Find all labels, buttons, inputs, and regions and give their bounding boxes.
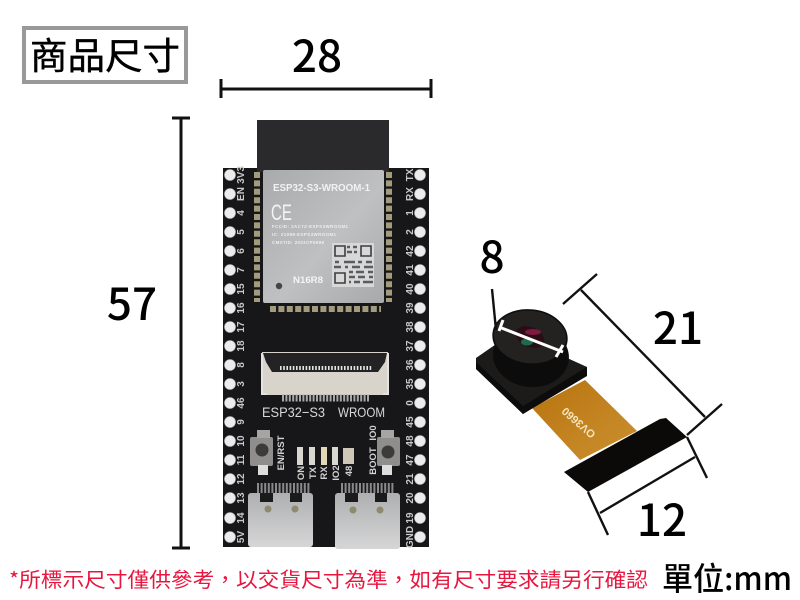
left pin labels: 13 — [236, 492, 247, 504]
left pin headers — [224, 170, 236, 542]
status LEDs: 48 — [344, 466, 355, 476]
left pin labels: 3V3 — [236, 166, 247, 184]
status LEDs: TX — [308, 466, 319, 479]
right pin labels — [405, 168, 416, 548]
antenna section — [257, 120, 389, 172]
left pin labels: 5 — [236, 229, 247, 235]
right pin labels: 1 — [405, 210, 416, 216]
right pin headers — [414, 170, 426, 542]
left pin labels: EN — [236, 187, 247, 201]
right pin labels: 41 — [405, 264, 416, 276]
right pin labels: 35 — [405, 378, 416, 390]
right pin labels: 38 — [405, 321, 416, 333]
left pin labels: 12 — [236, 473, 247, 485]
status LEDs: RX — [319, 466, 330, 480]
left pin labels: 18 — [236, 340, 247, 352]
right pin labels: GND — [405, 526, 416, 548]
footer note: *所標示尺寸僅供參考，以交貨尺寸為準，如有尺寸要求請另行確認 — [9, 563, 648, 593]
right pin labels: 0 — [405, 400, 416, 406]
ESP32-S3 development board — [223, 120, 429, 549]
unit label: 單位:mm — [662, 554, 792, 600]
boot button: IO0 — [368, 425, 379, 441]
status LEDs: ON — [296, 466, 307, 480]
USB-C port right — [335, 488, 400, 549]
ESP32-S3-WROOM-1 metal module: CE — [271, 200, 292, 225]
dimension: cable length 21 — [563, 274, 722, 435]
reset button — [250, 430, 287, 475]
flex cable print: OV3660 — [560, 404, 598, 440]
ESP32-S3-WROOM-1 metal module: FCCID: 2AC7Z-ESPS3WROOM1 — [272, 224, 349, 229]
right pin labels: 40 — [405, 283, 416, 295]
left pin labels: 8 — [236, 362, 247, 368]
left pin labels: 14 — [236, 512, 247, 524]
ESP32-S3-WROOM-1 metal module: ESP32-S3-WROOM-1 — [273, 183, 370, 194]
left pin labels: 7 — [236, 267, 247, 273]
ESP32-S3-WROOM-1 metal module: IC: 21098-ESPS3WROOM1 — [272, 232, 337, 237]
right pin labels: 37 — [405, 340, 416, 352]
left pin labels: 4 — [236, 210, 247, 216]
right pin labels: 2 — [405, 229, 416, 235]
dimension: cable length 21: 21 — [653, 293, 703, 357]
dimension: lens diameter 8 — [479, 222, 563, 357]
dimension: connector width 12 — [588, 437, 707, 549]
right pin labels: 36 — [405, 359, 416, 371]
right pin labels: 42 — [405, 245, 416, 257]
flex cable — [532, 380, 637, 460]
ESP32-S3 development board: WROOM — [338, 404, 385, 420]
left pin labels: 11 — [236, 454, 247, 465]
boot button: BOOT — [368, 447, 379, 475]
status LEDs: IO2 — [331, 465, 342, 481]
dimension: board height 57: 57 — [107, 269, 157, 333]
right pin labels: 47 — [405, 454, 416, 466]
right pin labels: 19 — [405, 512, 416, 524]
USB-C port left — [248, 488, 313, 547]
FPC camera connector — [262, 352, 388, 398]
right pin labels: 39 — [405, 302, 416, 314]
right pin labels: TX — [405, 168, 416, 181]
sensor base — [476, 333, 587, 414]
boot button — [368, 425, 400, 475]
dimension: board width 28 — [221, 21, 431, 98]
reset button: EN/RST — [276, 435, 287, 470]
ESP32-S3-WROOM-1 metal module — [263, 170, 384, 303]
right pin labels: RX — [405, 187, 416, 201]
left pin labels: 17 — [236, 321, 247, 333]
left pin labels: 9 — [236, 419, 247, 425]
right pin labels: 20 — [405, 492, 416, 504]
ESP32-S3-WROOM-1 metal module: N16R8 — [293, 275, 323, 285]
left pin labels: 5V — [236, 531, 247, 543]
title: product size label: 商品尺寸 — [30, 26, 180, 80]
left pin labels: 3 — [236, 381, 247, 387]
left pin labels: 46 — [236, 397, 247, 409]
status LEDs — [296, 447, 355, 481]
right pin labels: 45 — [405, 416, 416, 428]
right pin labels: 48 — [405, 435, 416, 447]
lens barrel — [490, 321, 572, 391]
QR code — [332, 243, 374, 287]
left pin labels: 6 — [236, 248, 247, 254]
board body — [223, 168, 429, 547]
dimension: connector width 12: 12 — [637, 485, 687, 549]
dimension: board height 57 — [107, 118, 190, 548]
left pin labels — [236, 166, 247, 543]
camera module OV3660 — [476, 306, 687, 492]
lens glass — [512, 322, 548, 352]
left pin labels: 10 — [236, 435, 247, 447]
left pin labels: 16 — [236, 302, 247, 314]
board silkscreen label: ESP32−S3 — [262, 404, 325, 420]
right pin labels: 21 — [405, 473, 416, 485]
left pin labels: 15 — [236, 283, 247, 295]
dimension: lens diameter 8: 8 — [479, 222, 505, 286]
ESP32-S3-WROOM-1 metal module: CMIITID: 2022CP5998 — [272, 240, 325, 245]
dimension: board width 28: 28 — [292, 21, 342, 85]
black stiffener — [564, 418, 687, 492]
module castellated pads — [257, 172, 389, 309]
